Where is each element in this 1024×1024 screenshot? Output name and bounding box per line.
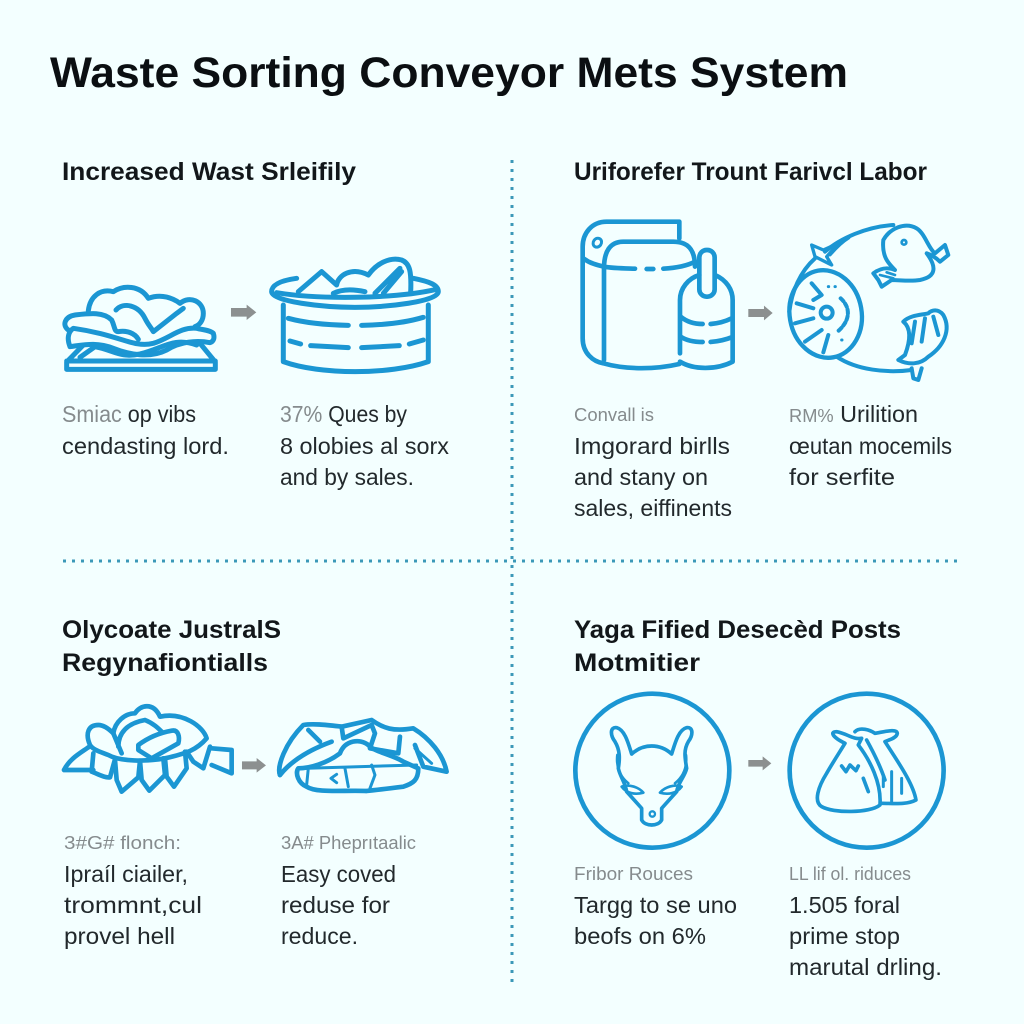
text: right column: RM% Urilition bbox=[789, 401, 918, 427]
text: right column: reduse for bbox=[281, 892, 390, 918]
text: left column: Targg to se uno bbox=[574, 892, 737, 918]
text: left column: provel hell bbox=[64, 923, 175, 949]
icon: animal head in circle bbox=[575, 694, 729, 848]
text: right column: 1.505 foral bbox=[789, 892, 900, 918]
heading bbox=[574, 616, 901, 677]
text: right column: 37% Ques by bbox=[280, 401, 407, 427]
text: left column: Imgorard birlls bbox=[574, 433, 730, 459]
text: right column: 3A# Pheprıtaalic bbox=[281, 833, 416, 853]
text: right column bbox=[280, 401, 450, 490]
heading: Motmitier bbox=[574, 649, 700, 677]
heading: Olycoate JustralS bbox=[62, 616, 281, 644]
text: left column: Convall is bbox=[574, 405, 654, 425]
text: right column bbox=[789, 401, 952, 490]
text: left column: Smiac op vibs bbox=[62, 401, 196, 427]
text: right column: and by sales. bbox=[280, 464, 414, 490]
icon: waste pile on tray bbox=[65, 287, 215, 369]
panel: top right bbox=[574, 158, 952, 521]
arrow bbox=[242, 758, 266, 773]
arrow bbox=[231, 305, 256, 320]
text: right column: for serfite bbox=[789, 464, 895, 490]
heading: Regynafiontialls bbox=[62, 649, 268, 677]
text: left column: sales, eiffinents bbox=[574, 495, 732, 521]
text: left column bbox=[574, 864, 737, 949]
panel: bottom right bbox=[574, 616, 944, 980]
text: left column bbox=[574, 405, 732, 521]
icon: full basket bbox=[272, 259, 438, 372]
arrow bbox=[748, 756, 771, 770]
text: left column bbox=[62, 401, 229, 459]
text: right column: reduce. bbox=[281, 923, 358, 949]
text: right column: prime stop bbox=[789, 923, 900, 949]
text: right column bbox=[789, 864, 942, 980]
panel: bottom left bbox=[62, 616, 447, 949]
text: right column: LL lif ol. riduces bbox=[789, 864, 911, 884]
text: left column bbox=[64, 833, 202, 949]
icon: container and tag bbox=[583, 222, 733, 368]
text: left column: trommnt,cul bbox=[64, 892, 202, 918]
arrow bbox=[748, 306, 773, 320]
text: right column: Easy coved bbox=[281, 861, 396, 887]
text: right column bbox=[281, 833, 416, 949]
panel: top left bbox=[62, 158, 450, 490]
text: left column: Fribor Rouces bbox=[574, 864, 693, 884]
title: Waste Sorting Conveyor Mets System bbox=[50, 49, 848, 97]
heading: Yaga Fified Desecèd Posts bbox=[574, 616, 901, 644]
heading bbox=[62, 616, 281, 677]
text: left column: beofs on 6% bbox=[574, 923, 706, 949]
icon: fish and wheel bbox=[783, 225, 948, 380]
heading: Increased Wast Srleifily bbox=[62, 158, 356, 186]
icon: compressed pile bbox=[279, 720, 447, 791]
text: left column: cendasting lord. bbox=[62, 433, 229, 459]
text: left column: Ipraíl ciailer, bbox=[64, 861, 188, 887]
text: right column: 8 olobies al sorx bbox=[280, 433, 450, 459]
heading: Uriforefer Trount Farivcl Labor bbox=[574, 158, 927, 186]
text: left column: 3#G# flonch: bbox=[64, 833, 181, 853]
icon: bags in circle bbox=[790, 694, 944, 848]
text: right column: œutan mocemils bbox=[789, 433, 952, 459]
icon: rounded pile bbox=[64, 706, 232, 792]
text: left column: and stany on bbox=[574, 464, 708, 490]
text: right column: marutal drling. bbox=[789, 954, 942, 980]
